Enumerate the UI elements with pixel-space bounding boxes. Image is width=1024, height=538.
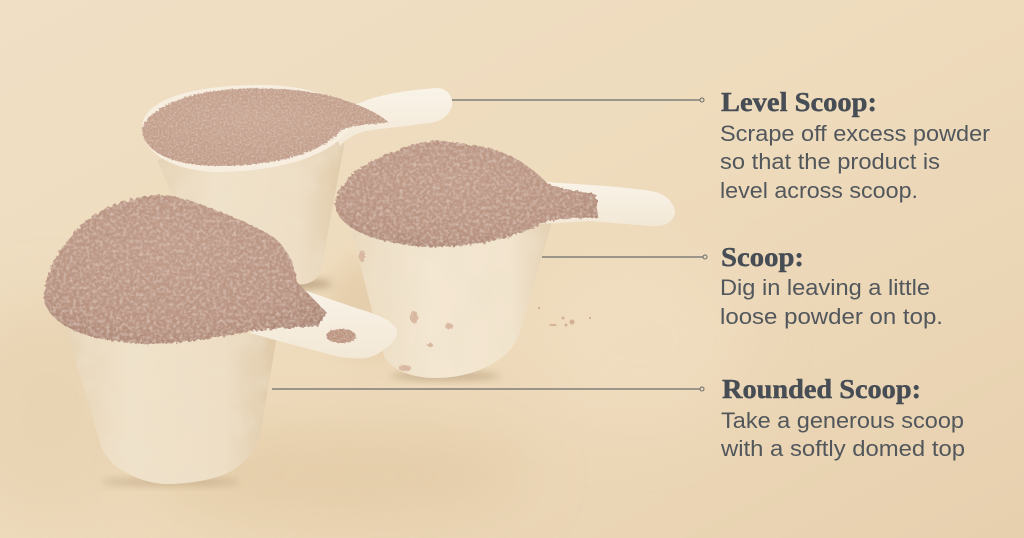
handle: middle scoop (540, 182, 675, 226)
body: rounded scoop: with a softly domed top (720, 436, 965, 461)
cup body: middle scoop (351, 222, 552, 378)
leader line: rounded scoop (272, 387, 704, 391)
powder: rounded scoop (44, 195, 327, 344)
body: rounded scoop: Take a generous scoop (721, 408, 964, 433)
handle: level scoop (330, 88, 452, 146)
body: level scoop: level across scoop. (720, 178, 918, 203)
leader line: scoop (542, 255, 707, 259)
spilled powder (538, 307, 591, 326)
leader line: level scoop (452, 98, 704, 102)
callout: level scoop (452, 87, 990, 203)
scoop: level scoop (back left) (142, 85, 452, 289)
powder crumbs on handle (326, 329, 356, 343)
scoop: rounded scoop (front left) (44, 195, 397, 486)
heading: rounded scoop: Rounded Scoop: (722, 374, 921, 404)
rim: level scoop (142, 85, 352, 172)
handle: rounded scoop (250, 286, 397, 358)
body: scoop (720, 275, 943, 329)
scoop: middle scoop (335, 141, 675, 380)
body: level scoop: Scrape off excess powder (720, 121, 990, 146)
body: rounded scoop (720, 408, 965, 461)
cup body: level scoop (157, 135, 346, 284)
powder specks on cup (359, 250, 453, 371)
body: scoop: loose powder on top. (720, 304, 943, 329)
heading: level scoop: Level Scoop: (721, 87, 877, 117)
body: scoop: Dig in leaving a little (720, 275, 930, 300)
body: level scoop (720, 121, 990, 203)
body: level scoop: so that the product is (720, 149, 940, 174)
powder: middle scoop (335, 141, 598, 247)
cup body: rounded scoop (66, 330, 277, 484)
callout: scoop (542, 242, 943, 329)
heading: scoop: Scoop: (721, 242, 804, 272)
callout: rounded scoop (272, 374, 965, 461)
powder: level scoop (142, 88, 388, 166)
